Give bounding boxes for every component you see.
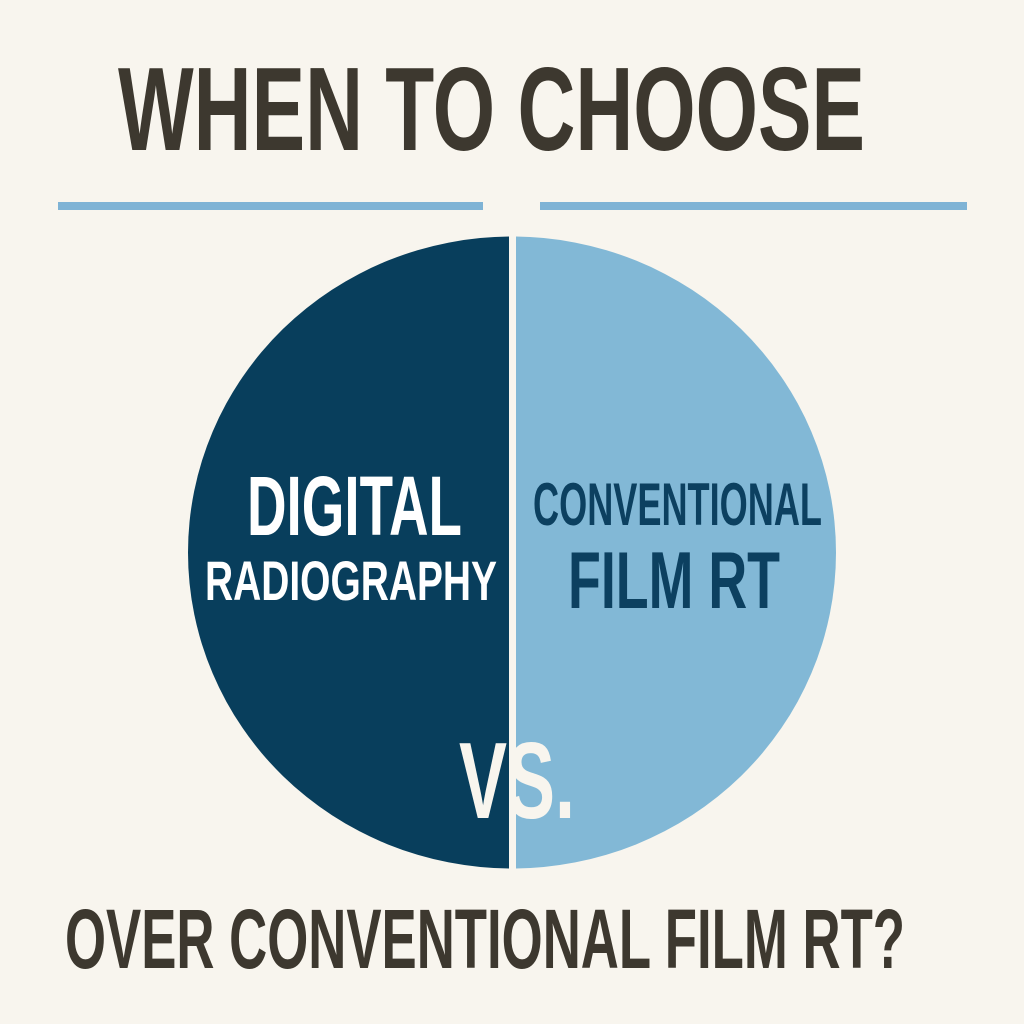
infographic (58, 66, 967, 969)
half: digital radiography (188, 236, 509, 868)
vs label: VS. (459, 720, 575, 842)
half: digital radiography: RADIOGRAPHY (205, 549, 497, 612)
half: digital radiography: DIGITAL (247, 459, 462, 553)
half: conventional film RT (516, 236, 836, 868)
half: conventional film RT: CONVENTIONAL (533, 471, 822, 538)
circle: comparison (188, 236, 836, 868)
half: conventional film RT: FILM RT (568, 536, 780, 626)
